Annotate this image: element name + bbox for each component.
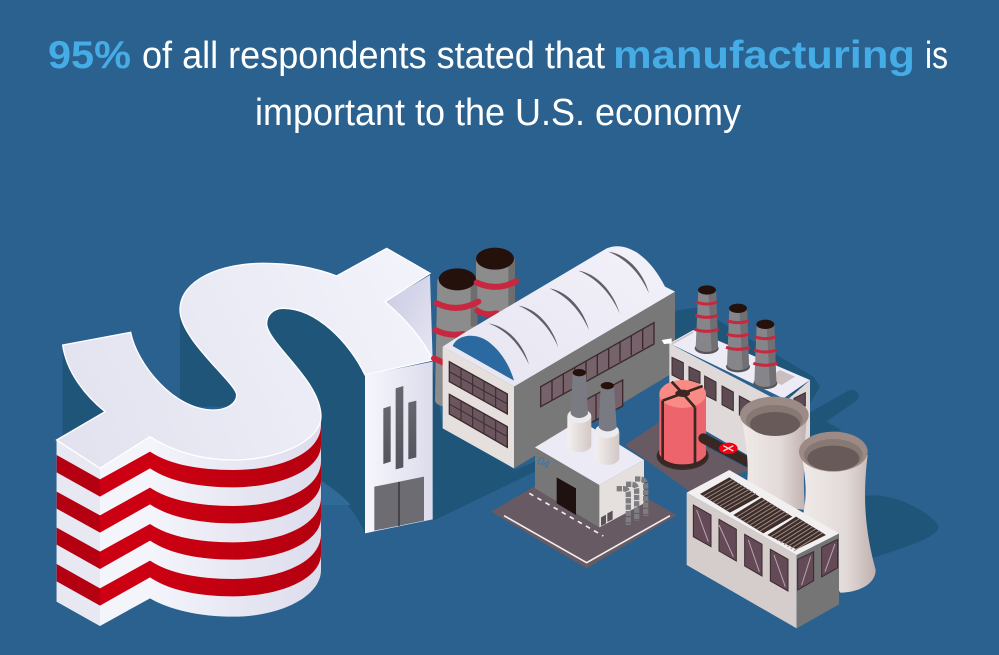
cooling tower 2 <box>799 432 876 593</box>
title: is <box>925 35 948 77</box>
dollar: left facet <box>57 440 100 626</box>
title: of all respondents stated that <box>142 35 605 77</box>
front building vents <box>700 477 826 549</box>
tower: door <box>374 477 424 531</box>
boiler roof <box>535 420 644 485</box>
right factory walls <box>669 343 810 470</box>
roof ribs <box>488 252 649 365</box>
dollar: red stripes <box>100 425 321 606</box>
concrete pad <box>491 460 677 568</box>
factory side wall <box>514 292 675 468</box>
side wall windows <box>541 323 654 425</box>
roof arch window <box>453 336 514 381</box>
rear chimneys <box>434 248 516 407</box>
boiler vents <box>601 511 613 526</box>
factory end wall <box>443 347 514 468</box>
cooling tower 1 <box>740 397 809 510</box>
front building walls <box>687 493 797 628</box>
boiler walls <box>535 447 599 527</box>
tower: window bars <box>383 386 416 469</box>
pad road markings <box>504 516 670 563</box>
red tank pad <box>625 422 750 492</box>
dollar: lighter shadow wedge <box>322 482 351 505</box>
large factory with chimneys <box>434 246 675 468</box>
title: manufacturing <box>613 34 915 77</box>
small boiler building on pad <box>491 369 677 568</box>
front building roof <box>687 470 839 555</box>
factory curved roof <box>443 246 675 387</box>
boiler door <box>557 477 576 515</box>
dollar sign building <box>57 248 433 626</box>
ground shadows <box>63 303 939 558</box>
red tank <box>657 380 709 470</box>
right factory roof <box>669 330 810 398</box>
red valve <box>719 443 738 454</box>
boiler pipes <box>617 479 646 525</box>
dollar: top face <box>57 248 433 468</box>
boiler number: 04 <box>535 455 552 472</box>
title <box>48 34 948 134</box>
right factory with three chimneys <box>625 285 876 628</box>
title: 95% <box>48 34 131 77</box>
boiler stacks <box>567 369 619 465</box>
front building windows <box>693 505 838 591</box>
dollar: lavender arm side <box>385 275 433 360</box>
right factory windows <box>672 357 805 415</box>
dollar: extruded side wall <box>57 417 321 626</box>
three chimneys <box>695 285 777 389</box>
end wall windows <box>449 362 507 447</box>
tower: front face <box>365 362 433 533</box>
pipe <box>703 438 747 462</box>
dollar: left facet stripes <box>57 455 100 606</box>
title: important to the U.S. economy <box>255 92 741 134</box>
